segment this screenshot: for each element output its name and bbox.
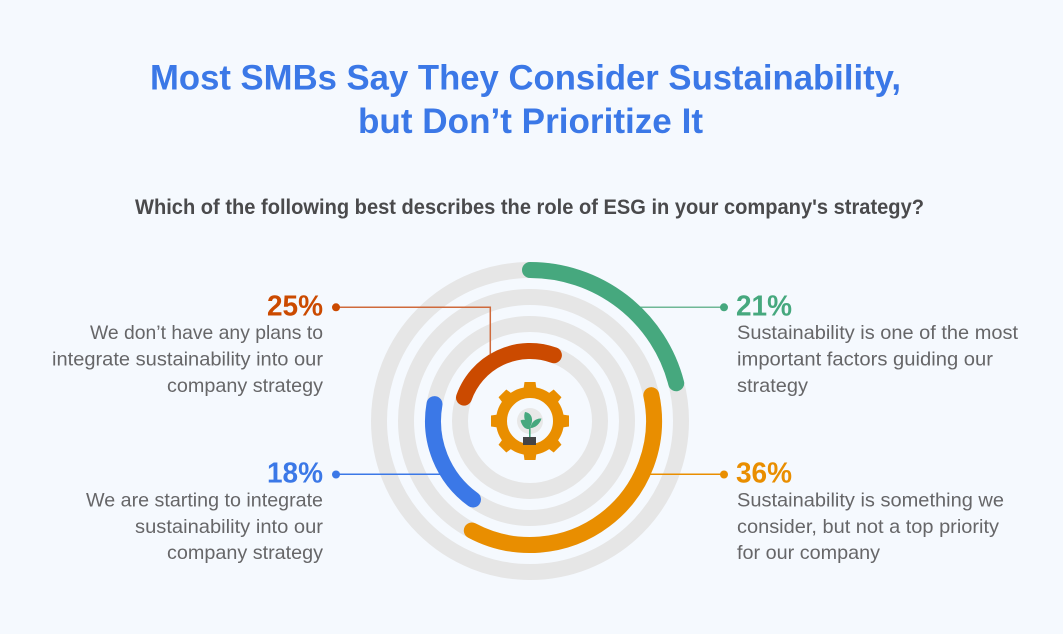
connector: 21% — [640, 306, 724, 308]
arc: 18% blue — [433, 404, 473, 500]
arc: 21% green — [530, 270, 676, 383]
callout: 36%: for our company — [737, 542, 880, 564]
title — [150, 58, 901, 141]
callout: 21%: important factors guiding our — [737, 348, 994, 370]
connector dots — [332, 303, 728, 478]
survey question subtitle: Which of the following best describes the role of ESG in your company's strategy? — [135, 195, 924, 219]
plant — [517, 408, 543, 445]
callout: 18% — [86, 458, 324, 564]
callout: 21%: strategy — [737, 375, 808, 397]
callout: 36%: 36% — [736, 458, 792, 490]
callout: 25%: 25% — [267, 291, 323, 323]
connector: 18% — [336, 473, 442, 475]
callout: 21% — [736, 291, 1019, 397]
callout: 25%: integrate sustainability into our — [52, 348, 324, 370]
connector: 25% — [336, 307, 490, 354]
radial chart — [336, 270, 724, 572]
icon: gear with plant — [491, 382, 569, 460]
callout: 21%: Sustainability is one of the most — [737, 322, 1019, 344]
callout: 18%: company strategy — [167, 542, 323, 564]
callout: 18%: sustainability into our — [135, 516, 324, 538]
background rings — [379, 270, 681, 572]
connector: 36% — [650, 473, 724, 475]
title: but Don’t Prioritize It — [358, 102, 703, 141]
arc: 25% red — [464, 351, 554, 398]
callout: 36% — [736, 458, 1004, 564]
arc: 36% orange — [472, 395, 654, 545]
callout: 21%: 21% — [736, 291, 792, 323]
gear — [491, 382, 569, 460]
callout: 25%: We don’t have any plans to — [90, 322, 323, 344]
title: Most SMBs Say They Consider Sustainability, — [150, 58, 901, 98]
callout: 18%: 18% — [267, 458, 323, 490]
callout: 25% — [52, 291, 324, 397]
callout: 36%: consider, but not a top priority — [737, 516, 999, 538]
callout: 36%: Sustainability is something we — [737, 490, 1004, 512]
callout: 25%: company strategy — [167, 375, 323, 397]
callout: 18%: We are starting to integrate — [86, 490, 323, 512]
